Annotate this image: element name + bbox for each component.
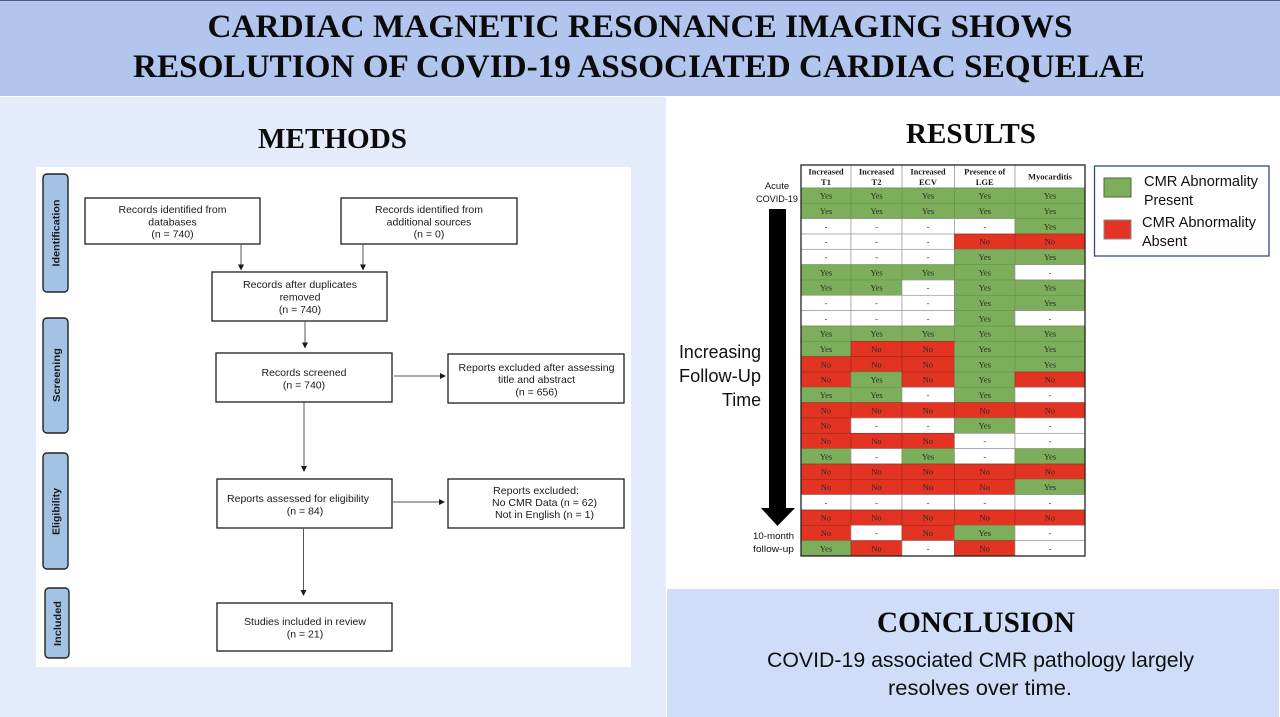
box: records from additional sources: [341, 198, 517, 244]
table body rows: Yes: [1044, 252, 1056, 262]
table body rows: Yes: [820, 267, 832, 277]
stage: identification: [43, 174, 68, 292]
table body rows: Yes: [979, 528, 991, 538]
table header: Presence of: [964, 166, 1005, 176]
title banner: [0, 0, 1280, 96]
table header: Increased: [808, 166, 844, 176]
table body rows: -: [1049, 497, 1052, 507]
label: acute COVID-19: [756, 181, 798, 205]
table body rows: No: [871, 543, 882, 553]
heading: results: RESULTS: [906, 118, 1036, 150]
box: records after duplicates removed: removed: [280, 292, 321, 304]
table body rows: Yes: [1044, 221, 1056, 231]
arrow: duplicates removed to screened: [302, 321, 308, 348]
table body rows: -: [875, 451, 878, 461]
table body rows: -: [825, 313, 828, 323]
stage: eligibility: Eligibility: [50, 488, 62, 535]
table body rows: No: [821, 359, 831, 369]
table body rows: Yes: [870, 206, 883, 216]
label: acute COVID-19: Acute: [765, 181, 789, 192]
label: increasing follow-up time: Increasing: [679, 342, 761, 362]
table header: T1: [821, 177, 831, 187]
arrow: assessed to included: [300, 528, 306, 596]
table body rows: Yes: [1044, 206, 1056, 216]
box: reports excluded: [448, 479, 624, 528]
table body rows: No: [871, 436, 882, 446]
table body rows: Yes: [979, 267, 991, 277]
table body rows: -: [1049, 436, 1052, 446]
box: studies included in review: [217, 603, 392, 651]
label: acute COVID-19: COVID-19: [756, 194, 798, 205]
table body rows: No: [821, 375, 831, 385]
table body rows: -: [1049, 267, 1052, 277]
table body rows: Yes: [1044, 359, 1056, 369]
conclusion text: resolves over time.: [888, 677, 1072, 700]
table body rows: Yes: [1044, 191, 1056, 201]
table body rows: -: [983, 451, 986, 461]
table body rows: Yes: [979, 206, 991, 216]
table body rows: No: [871, 344, 882, 354]
table body rows: -: [1049, 390, 1052, 400]
table body rows: No: [821, 528, 831, 538]
panel: conclusion: [667, 589, 1279, 717]
table body rows: No: [1045, 237, 1055, 247]
table body rows: Yes: [870, 329, 883, 339]
arrow: databases to duplicates removed: [238, 244, 244, 270]
label: 10-month follow-up: follow-up: [753, 544, 794, 555]
table body rows: Yes: [870, 375, 883, 385]
table body rows: Yes: [820, 283, 832, 293]
table body rows: No: [923, 513, 933, 523]
table body rows: No: [923, 359, 933, 369]
table body rows: Yes: [979, 421, 991, 431]
table body rows: Yes: [922, 329, 934, 339]
box: records from additional sources: Records identified from: [375, 204, 483, 216]
box: records from databases: databases: [148, 216, 197, 228]
box: studies included in review: Studies included in review: [244, 616, 366, 628]
table body rows: -: [875, 252, 878, 262]
box: records screened: Records screened: [262, 367, 347, 379]
table body rows: Yes: [979, 329, 991, 339]
table body rows: -: [875, 497, 878, 507]
stage: screening: Screening: [51, 348, 63, 402]
table body rows: -: [825, 221, 828, 231]
table body rows: No: [980, 405, 990, 415]
box: records screened: [216, 353, 392, 402]
table body rows: -: [927, 313, 930, 323]
table body rows: -: [825, 252, 828, 262]
legend item: abnormality present: Present: [1144, 193, 1193, 209]
box: reports excluded after title and abstract: Reports excluded after assessing: [458, 362, 615, 374]
table body rows: No: [923, 528, 933, 538]
table body rows: -: [875, 298, 878, 308]
table body rows: -: [1049, 543, 1052, 553]
legend item: abnormality absent: [1104, 215, 1257, 250]
legend item: abnormality present: CMR Abnormality: [1144, 174, 1259, 190]
table body rows: No: [821, 513, 831, 523]
box: records from databases: Records identified from: [118, 204, 227, 216]
box: reports excluded after title and abstract: [448, 354, 624, 403]
table body rows: Yes: [820, 344, 832, 354]
table header: T2: [872, 177, 881, 187]
label: increasing follow-up time: Follow-Up: [679, 366, 761, 386]
table body rows: Yes: [820, 191, 832, 201]
table body rows: Yes: [820, 390, 832, 400]
table body rows: Yes: [979, 313, 991, 323]
table header: ECV: [919, 177, 938, 187]
box: reports assessed for eligibility: (n = 84): [287, 506, 323, 518]
table body rows: No: [1045, 375, 1055, 385]
table body rows: No: [1045, 513, 1055, 523]
table body rows: Yes: [1044, 298, 1056, 308]
table body rows: -: [927, 237, 930, 247]
table body rows: Yes: [870, 191, 883, 201]
table body rows: No: [923, 482, 933, 492]
table body rows: -: [927, 252, 930, 262]
table body rows: No: [871, 482, 882, 492]
table body rows: -: [983, 436, 986, 446]
table outer border: [801, 165, 1085, 556]
stage: included: Included: [52, 601, 64, 646]
table body rows: Yes: [1044, 451, 1056, 461]
table body rows: No: [923, 436, 933, 446]
table body rows: Yes: [979, 283, 991, 293]
label: 10-month follow-up: [753, 531, 794, 555]
table body rows: Yes: [1044, 329, 1056, 339]
box: reports excluded: Not in English (n = 1): [495, 509, 594, 521]
box: records after duplicates removed: (n = 740): [279, 304, 321, 316]
table body rows: Yes: [820, 329, 832, 339]
box: reports assessed for eligibility: [217, 479, 392, 528]
table body rows: -: [825, 298, 828, 308]
table body rows: No: [871, 513, 882, 523]
table body rows: -: [875, 421, 878, 431]
table body rows: -: [825, 497, 828, 507]
table body rows: No: [923, 375, 933, 385]
box: records from additional sources: additional sources: [387, 216, 471, 228]
table body rows: No: [821, 421, 831, 431]
table body rows: -: [983, 497, 986, 507]
stage: eligibility: [43, 453, 68, 569]
table header: Increased: [910, 166, 946, 176]
box: reports excluded: Reports excluded:: [493, 485, 579, 497]
table body rows: -: [875, 221, 878, 231]
table body rows: -: [825, 237, 828, 247]
table header: Myocarditis: [1028, 172, 1073, 182]
panel: PRISMA flow diagram: [36, 167, 631, 667]
table body rows: -: [927, 421, 930, 431]
table body rows: -: [875, 528, 878, 538]
table body rows: -: [927, 221, 930, 231]
table body rows: -: [875, 313, 878, 323]
arrow: assessed to excluded: [393, 499, 445, 505]
table body rows: -: [1049, 528, 1052, 538]
box: studies included in review: (n = 21): [287, 628, 323, 640]
table body rows: Yes: [979, 375, 991, 385]
table body rows: Yes: [979, 252, 991, 262]
box: records from additional sources: (n = 0): [414, 228, 444, 240]
table body rows: Yes: [979, 191, 991, 201]
table body rows: No: [821, 467, 831, 477]
table body rows: No: [980, 467, 990, 477]
table body rows: No: [871, 467, 882, 477]
table body rows: No: [980, 482, 990, 492]
title banner: RESOLUTION OF COVID-19 ASSOCIATED CARDIAC SEQUELAE: [133, 49, 1145, 85]
table body rows: No: [1045, 467, 1055, 477]
box: records after duplicates removed: Records after duplicates: [243, 279, 357, 291]
title banner: CARDIAC MAGNETIC RESONANCE IMAGING SHOWS: [208, 9, 1072, 45]
legend item: abnormality absent: CMR Abnormality: [1142, 215, 1257, 231]
table header: [801, 165, 1085, 188]
table header: Increased: [859, 166, 894, 176]
table body rows: Yes: [1044, 344, 1056, 354]
box: records screened: (n = 740): [283, 380, 325, 392]
arrow: screened to excluded: [394, 373, 446, 379]
box: reports excluded after title and abstract: (n = 656): [515, 386, 558, 398]
box: records after duplicates removed: [212, 272, 387, 321]
left panel background: [0, 97, 666, 717]
legend item: abnormality present: [1104, 174, 1259, 209]
label: 10-month follow-up: 10-month: [753, 531, 794, 542]
label: increasing follow-up time: Time: [722, 390, 761, 410]
table body rows: Yes: [922, 191, 934, 201]
table body rows: -: [983, 221, 986, 231]
table body rows: [801, 188, 1085, 556]
table body rows: No: [871, 359, 882, 369]
table body rows: Yes: [1044, 482, 1056, 492]
stage: identification: Identification: [50, 200, 62, 266]
table body rows: -: [927, 543, 930, 553]
table body rows: No: [980, 543, 990, 553]
arrow: additional sources to duplicates removed: [360, 244, 366, 270]
table: CMR findings by study: [801, 165, 1085, 556]
table body rows: Yes: [820, 451, 832, 461]
table body rows: Yes: [1044, 283, 1056, 293]
table body rows: No: [821, 482, 831, 492]
table body rows: Yes: [979, 344, 991, 354]
table body rows: No: [871, 405, 882, 415]
table body rows: -: [1049, 421, 1052, 431]
table body rows: Yes: [922, 267, 934, 277]
table body rows: No: [980, 237, 990, 247]
table body rows: -: [927, 497, 930, 507]
table body rows: Yes: [979, 298, 991, 308]
conclusion text: COVID-19 associated CMR pathology largely: [767, 649, 1195, 672]
table body rows: No: [923, 344, 933, 354]
table body rows: Yes: [870, 267, 883, 277]
table body rows: Yes: [922, 206, 934, 216]
table body rows: -: [875, 237, 878, 247]
table body rows: -: [927, 283, 930, 293]
table body rows: No: [923, 467, 933, 477]
table body rows: No: [1045, 405, 1055, 415]
table body rows: Yes: [979, 359, 991, 369]
box: records from databases: (n = 740): [151, 228, 194, 240]
box: records from databases: [85, 198, 260, 244]
table body rows: Yes: [922, 451, 934, 461]
stage: screening: [43, 318, 68, 433]
stage: included: [45, 588, 69, 658]
arrow: time axis: [761, 209, 795, 526]
legend item: abnormality absent: Absent: [1142, 234, 1187, 250]
table body rows: Yes: [870, 283, 883, 293]
heading: methods: METHODS: [258, 124, 407, 155]
table body rows: -: [927, 298, 930, 308]
table body rows: -: [927, 390, 930, 400]
conclusion text: [767, 649, 1195, 700]
table body rows: No: [923, 405, 933, 415]
box: reports assessed for eligibility: Reports assessed for eligibility: [227, 493, 370, 505]
table body rows: -: [1049, 313, 1052, 323]
table body rows: Yes: [979, 390, 991, 400]
table body rows: No: [980, 513, 990, 523]
table header: LGE: [976, 177, 994, 187]
label: increasing follow-up time: [679, 342, 761, 410]
table body rows: Yes: [820, 206, 832, 216]
table body rows: Yes: [870, 390, 883, 400]
box: reports excluded: No CMR Data (n = 62): [492, 497, 597, 509]
box: reports excluded after title and abstract: title and abstract: [498, 374, 575, 386]
legend: [1094, 166, 1269, 256]
table body rows: Yes: [820, 543, 832, 553]
arrow: screened to assessed: [301, 402, 307, 472]
heading: conclusion: CONCLUSION: [877, 606, 1075, 639]
table body rows: No: [821, 436, 831, 446]
table body rows: No: [821, 405, 831, 415]
